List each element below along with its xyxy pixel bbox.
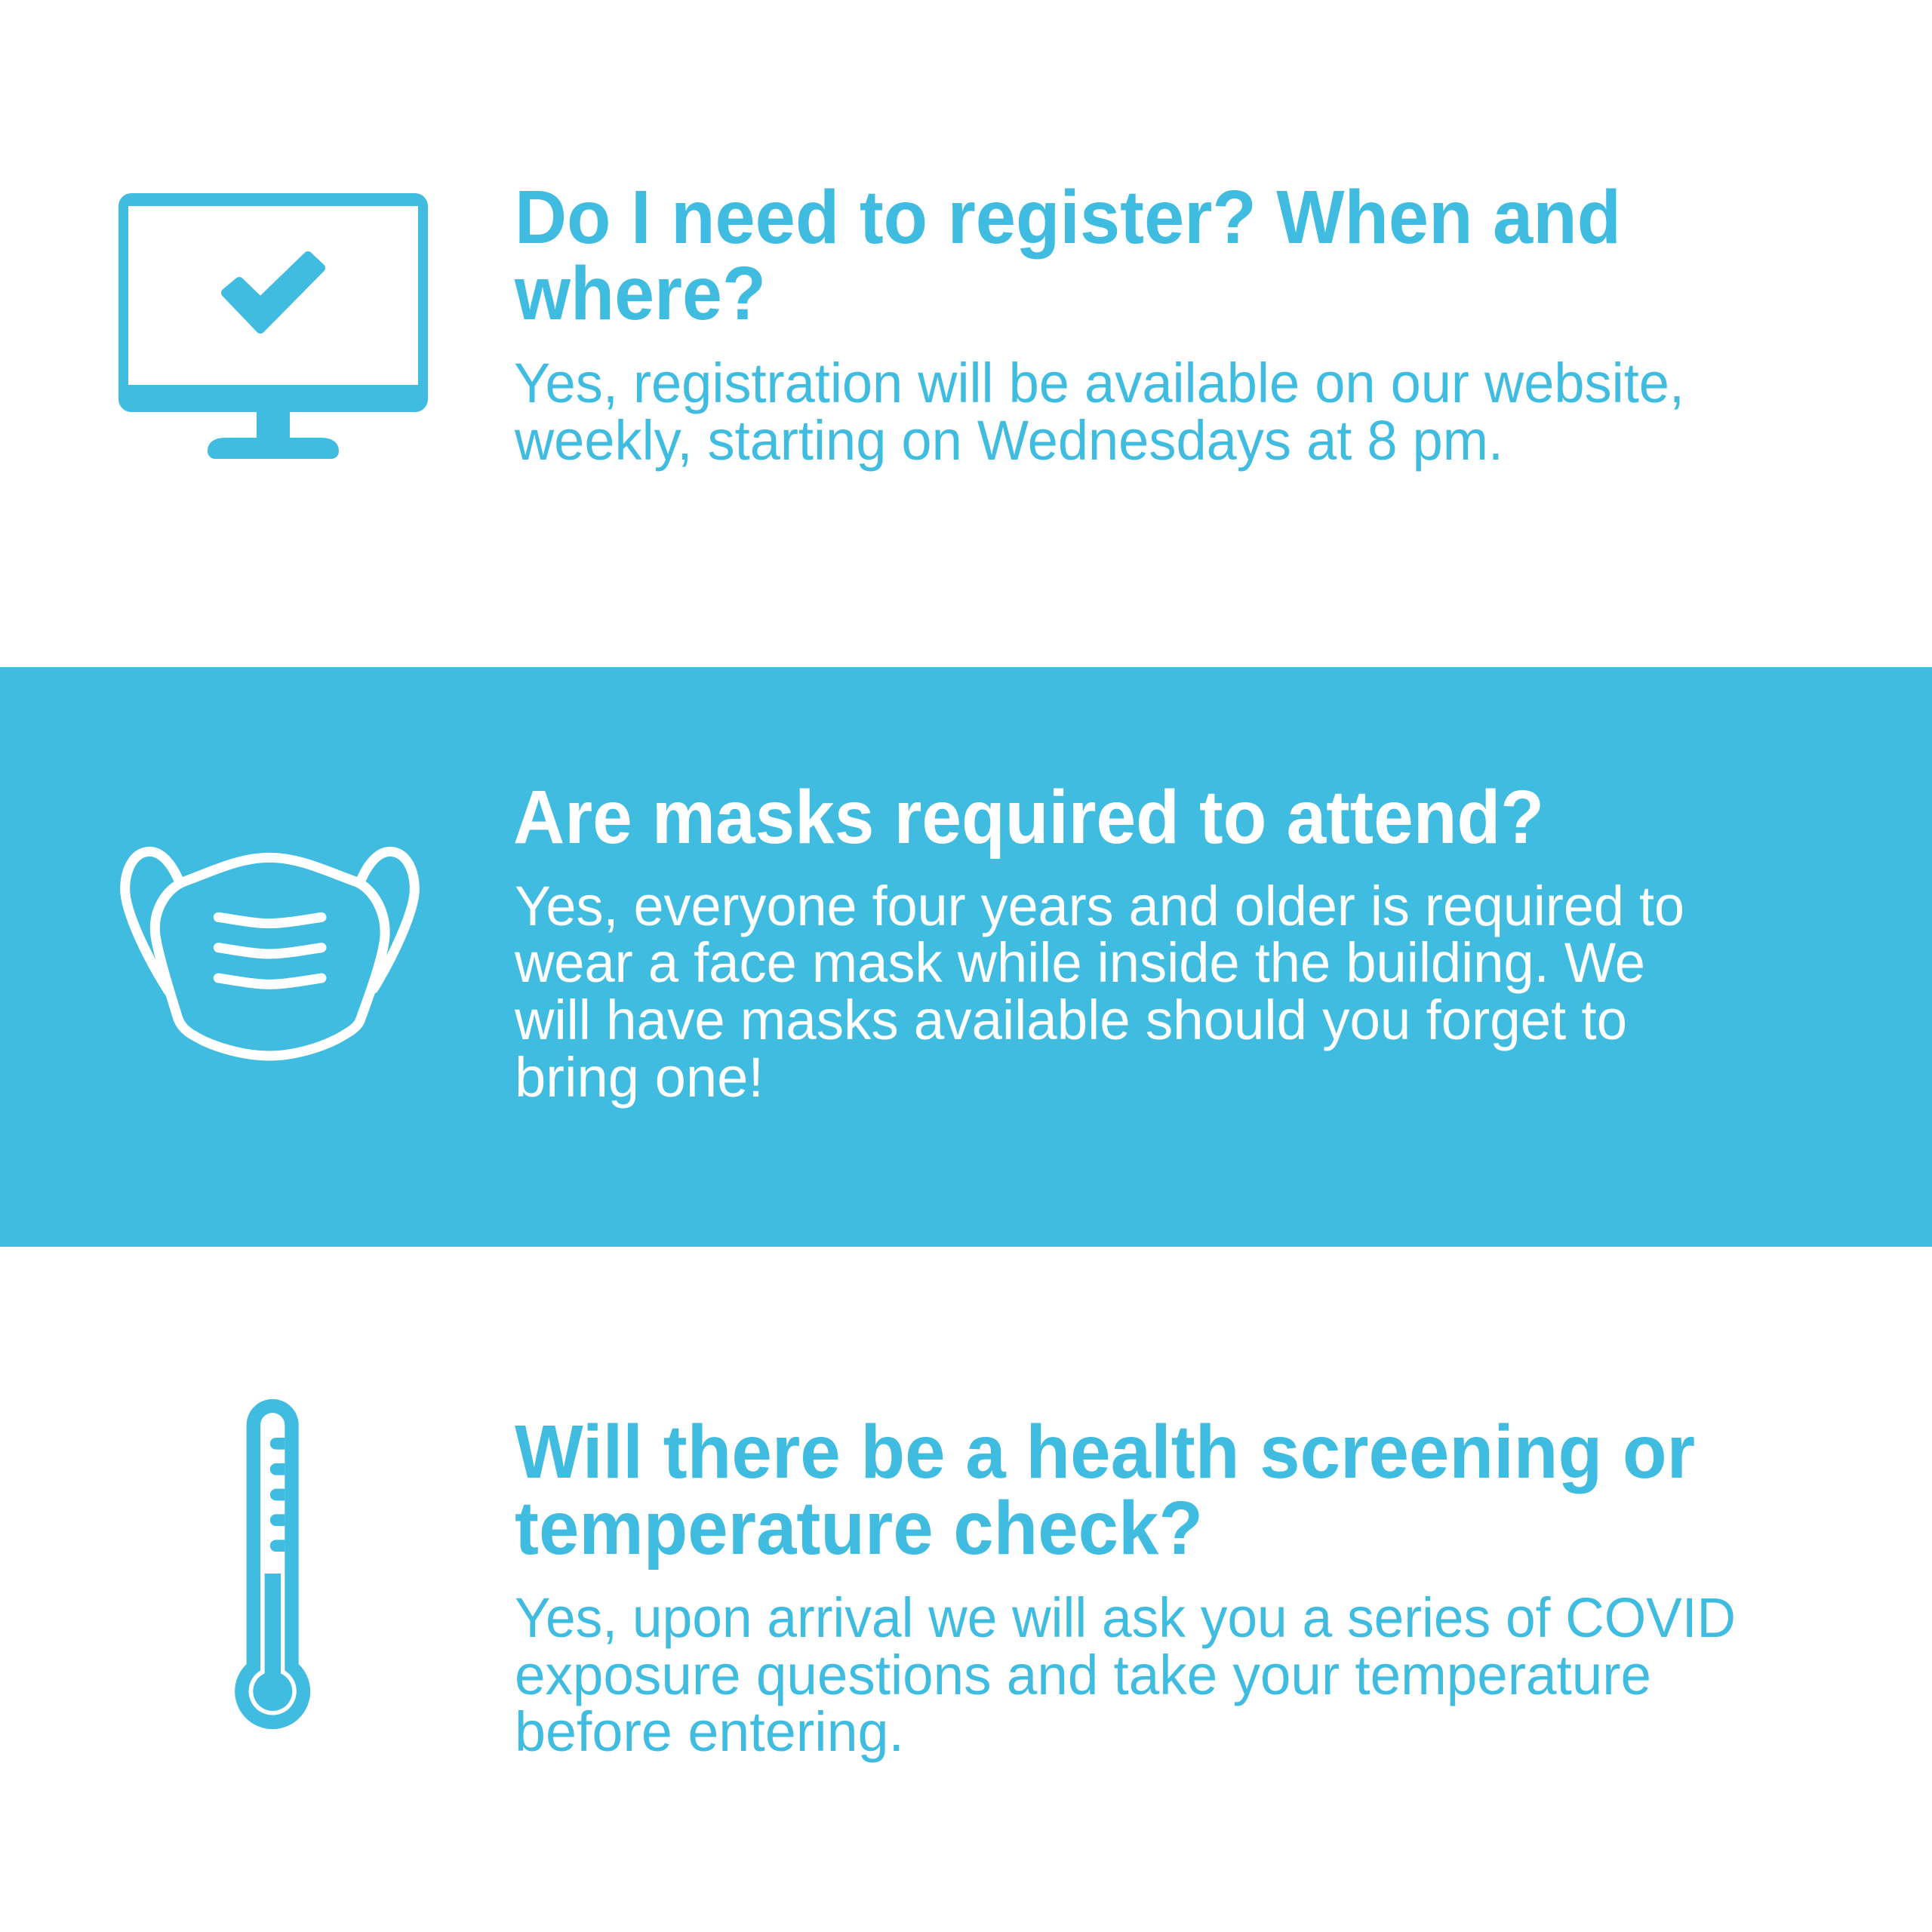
text block: masks answer: Yes, everyone four years and older is required to bbox=[515, 875, 1684, 937]
heading: do I need to register bbox=[514, 175, 1621, 336]
icon: face mask bbox=[125, 851, 414, 1056]
band background bbox=[0, 667, 1932, 1247]
heading: are masks required: Are masks required to attend? bbox=[513, 775, 1544, 860]
text block: masks answer: will have masks available should you forget to bbox=[514, 989, 1627, 1051]
text block: masks answer bbox=[514, 875, 1684, 1109]
text block: registration answer bbox=[514, 352, 1684, 472]
panel: masks band bbox=[0, 667, 1932, 1247]
text block: health screening answer: before entering. bbox=[515, 1700, 904, 1763]
icon: thermometer bbox=[235, 1399, 310, 1729]
icon: computer monitor with check mark bbox=[118, 193, 428, 459]
text block: masks answer: bring one! bbox=[515, 1046, 764, 1109]
heading: health screening question bbox=[515, 1410, 1695, 1571]
heading: health screening question: Will there be a health screening or bbox=[515, 1410, 1695, 1494]
text block: health screening answer: exposure questions and take your temperature bbox=[515, 1644, 1651, 1706]
heading: health screening question: temperature check? bbox=[515, 1486, 1203, 1571]
text block: masks answer: wear a face mask while inside the building. We bbox=[514, 931, 1645, 994]
panel: registration bbox=[118, 175, 1684, 472]
panel: health screening bbox=[235, 1399, 1736, 1763]
text block: registration answer: Yes, registration will be available on our website, bbox=[514, 352, 1684, 414]
text block: registration answer: weekly, starting on Wednesdays at 8 pm. bbox=[514, 409, 1503, 472]
text block: health screening answer bbox=[515, 1586, 1736, 1763]
heading: do I need to register: Do I need to register? When and bbox=[515, 175, 1621, 260]
text block: health screening answer: Yes, upon arrival we will ask you a series of COVID bbox=[515, 1586, 1736, 1649]
heading: do I need to register: where? bbox=[514, 251, 766, 336]
